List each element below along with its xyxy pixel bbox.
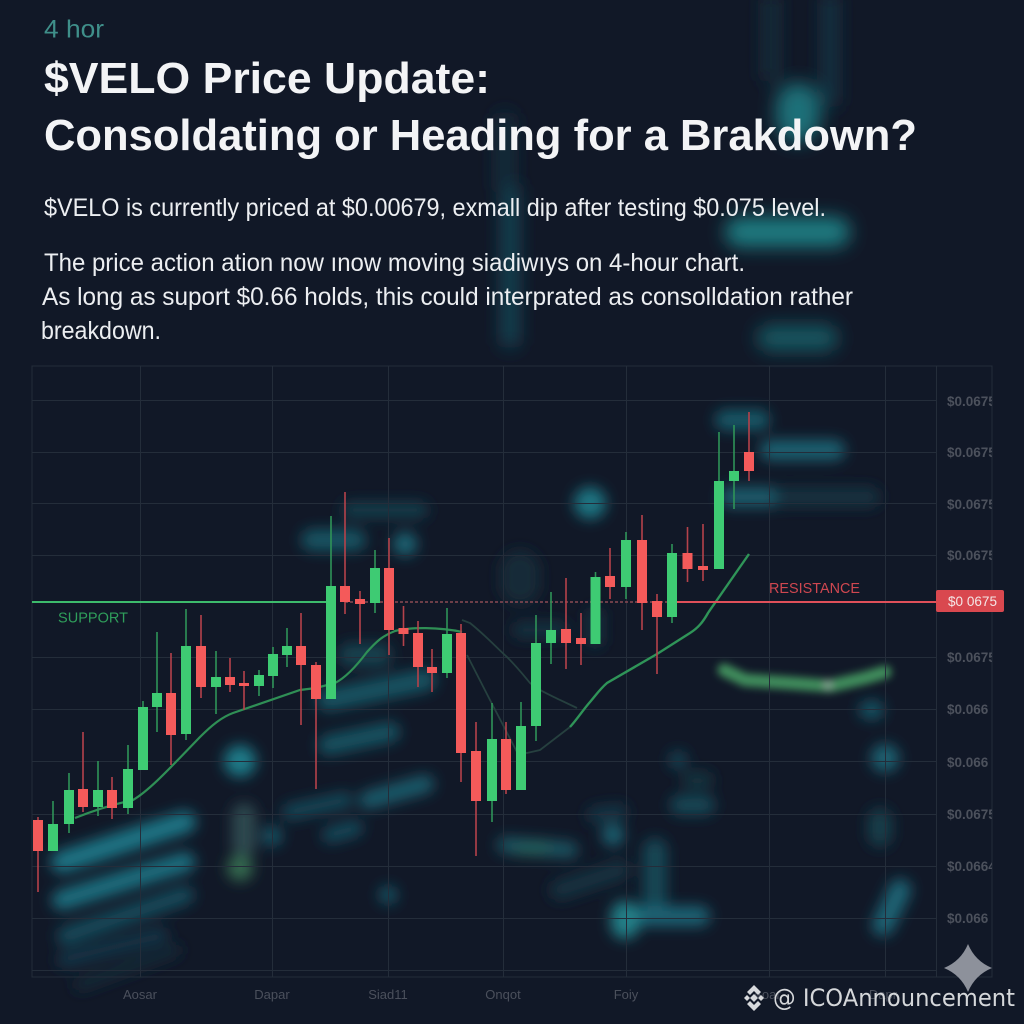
price axis labels: $0.066 (947, 755, 989, 770)
analysis text: As long as suport $0.66 holds, this could interprated as consolldation rather (42, 284, 853, 311)
blurred background: chart glow (62, 420, 900, 985)
analysis text: The price action ation now ınow moving siadiwıys on 4-hour chart. (44, 250, 745, 277)
price axis labels: $0.0675 (947, 445, 996, 460)
price axis labels: $0.0675 (947, 497, 996, 512)
timeframe label: 4 hor (44, 16, 104, 44)
panel: price chart (32, 366, 1004, 1002)
price axis labels: $0.0675 (947, 807, 996, 822)
chart grid (32, 366, 992, 977)
current price tag (936, 590, 1004, 612)
support label: SUPPORT (58, 610, 128, 626)
title: $VELO Price Update: (44, 54, 490, 103)
title (44, 54, 917, 160)
moving average faint branch (462, 620, 577, 708)
green glow streak (724, 670, 885, 686)
analysis text: breakdown. (41, 318, 161, 345)
dotted mid level (345, 601, 678, 603)
price axis labels: $0.066 (947, 911, 989, 926)
support line (32, 601, 331, 603)
icon: sparkle watermark (944, 944, 992, 992)
price axis labels (947, 394, 996, 926)
time axis labels (123, 987, 898, 1002)
time axis labels: Onqot (485, 987, 521, 1002)
time axis labels: Aosar (123, 987, 158, 1002)
price axis labels: $0.066 (947, 702, 989, 717)
blurred background: header glow (505, 0, 835, 340)
time axis labels: Foiy (614, 987, 639, 1002)
time axis labels: Dapar (254, 987, 290, 1002)
analysis text (41, 250, 853, 345)
handle watermark: @ ICOAnnouncement (773, 984, 1015, 1012)
moving average faint dip (467, 655, 570, 753)
current price tag: $0 0675 (948, 593, 997, 609)
candlesticks (33, 412, 754, 892)
price axis labels: $0.0675 (947, 394, 996, 409)
moving average line left (75, 628, 462, 818)
time axis labels: Dapr (869, 987, 898, 1002)
price axis labels: $0.0675 (947, 650, 996, 665)
price axis labels: $0.0675 (947, 548, 996, 563)
resistance label: RESISTANCE (769, 580, 860, 597)
price summary text: $VELO is currently priced at $0.00679, exmall dip after testing $0.075 level. (44, 195, 826, 222)
resistance line (677, 601, 936, 603)
moving average line right (570, 554, 749, 727)
icon: binance logo (744, 985, 764, 1011)
time axis labels: Siad11 (368, 987, 408, 1002)
title: Consoldating or Heading for a Brakdown? (44, 111, 917, 160)
time axis labels: Aoar (753, 987, 781, 1002)
price axis labels: $0.0664 (947, 859, 996, 874)
